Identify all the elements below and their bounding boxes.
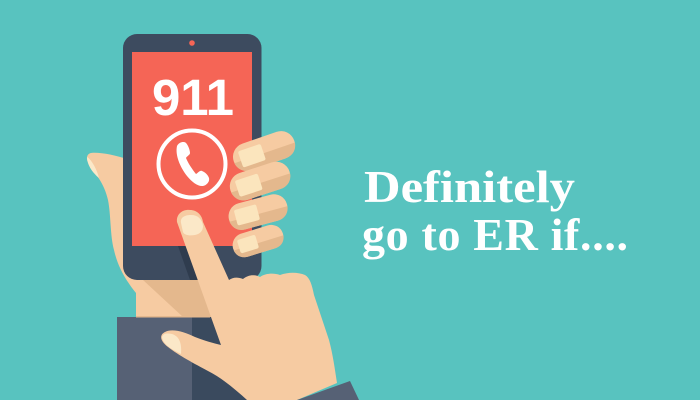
holding hand: palm and thumb behind phone	[87, 153, 215, 318]
finger 4	[230, 222, 286, 260]
finger 2	[226, 158, 294, 204]
wrist shadow	[143, 280, 215, 317]
finger 1	[229, 127, 299, 175]
screen	[132, 52, 252, 246]
heading: go to ER if....	[362, 209, 628, 260]
cuff	[297, 381, 359, 400]
finger shadow on phone	[178, 246, 198, 280]
phone body	[123, 34, 262, 280]
thumbnail	[87, 157, 99, 178]
heading	[362, 161, 628, 260]
icon: call circle	[158, 130, 226, 198]
camera	[189, 40, 195, 46]
holding fingers	[226, 127, 299, 260]
heading: Definitely	[364, 161, 575, 212]
pointing hand	[161, 210, 337, 400]
pointing fingernail	[181, 215, 203, 235]
sleeve	[117, 316, 255, 400]
thumbnail	[162, 333, 181, 354]
finger 3	[226, 191, 290, 233]
phone	[123, 34, 262, 280]
number 911: 911	[152, 69, 234, 126]
